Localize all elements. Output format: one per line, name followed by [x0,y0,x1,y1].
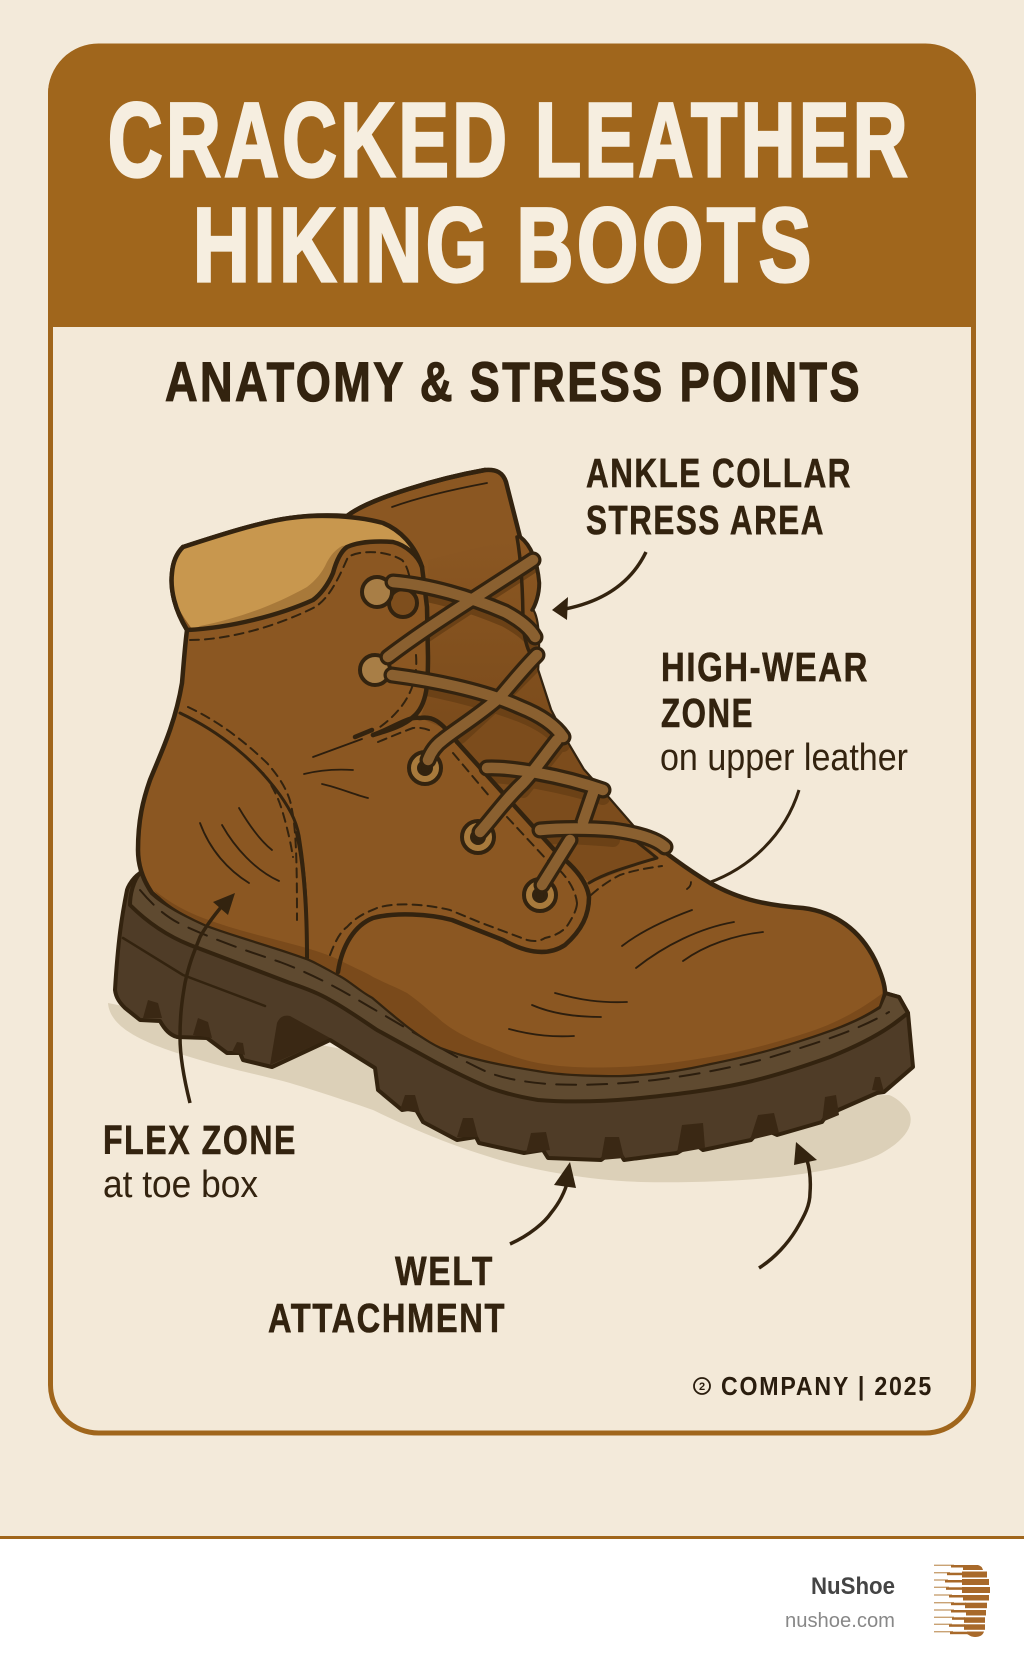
label: high-wear zone: on upper leather [660,737,908,779]
subtitle: ANATOMY & STRESS POINTS [165,350,862,413]
creases and wrinkles [200,483,763,1036]
label: ankle collar stress area: ANKLE COLLAR [586,450,852,496]
arrow: welt attachment [510,1162,576,1244]
copyright line: COMPANY | 2025 [721,1371,933,1401]
footer strip [0,1536,1024,1666]
padded ankle collar [172,470,485,735]
title [108,82,911,304]
label: welt attachment: WELT [395,1248,494,1294]
label: high-wear zone: HIGH-WEAR [661,644,869,690]
footer brand text: NuShoe [811,1573,895,1600]
eyelets [360,577,556,911]
icon: striped boot logo [934,1565,990,1637]
ground shadow [108,1003,911,1182]
arrow: sole [759,1142,817,1268]
darker leather band along welt [154,890,883,1075]
label: ankle collar stress area: STRESS AREA [586,497,825,543]
illustration: hiking boot [115,470,913,1160]
label: flex zone: FLEX ZONE [103,1117,297,1163]
laces: fill [388,560,665,885]
footer brand text: nushoe.com [785,1610,895,1632]
label: ankle collar stress area [586,450,852,543]
label: welt attachment [268,1248,506,1341]
tread notches [143,1000,884,1160]
label: flex zone [103,1117,297,1206]
boot sole with tread [115,860,913,1160]
arrow: high-wear zone [708,790,799,883]
copyright line: 2 [699,1381,705,1393]
label: welt attachment: ATTACHMENT [268,1295,506,1341]
footer brand text [785,1573,895,1632]
laces: dark outline [388,560,665,885]
panel: card frame [50,46,974,1433]
seams and stitching [180,537,662,972]
label: high-wear zone: ZONE [661,690,754,736]
lace shadows on tongue [428,569,620,847]
header band [48,44,975,327]
label: high-wear zone [660,644,908,779]
title: HIKING BOOTS [193,187,815,304]
boot upper leather [138,470,885,1075]
heel arch [270,1016,330,1065]
tongue shaded area [420,537,657,883]
arrow: flex zone [180,893,235,1103]
arrow: ankle collar [552,552,646,620]
welt band and stitching [130,860,908,1101]
label: flex zone: at toe box [103,1164,258,1206]
